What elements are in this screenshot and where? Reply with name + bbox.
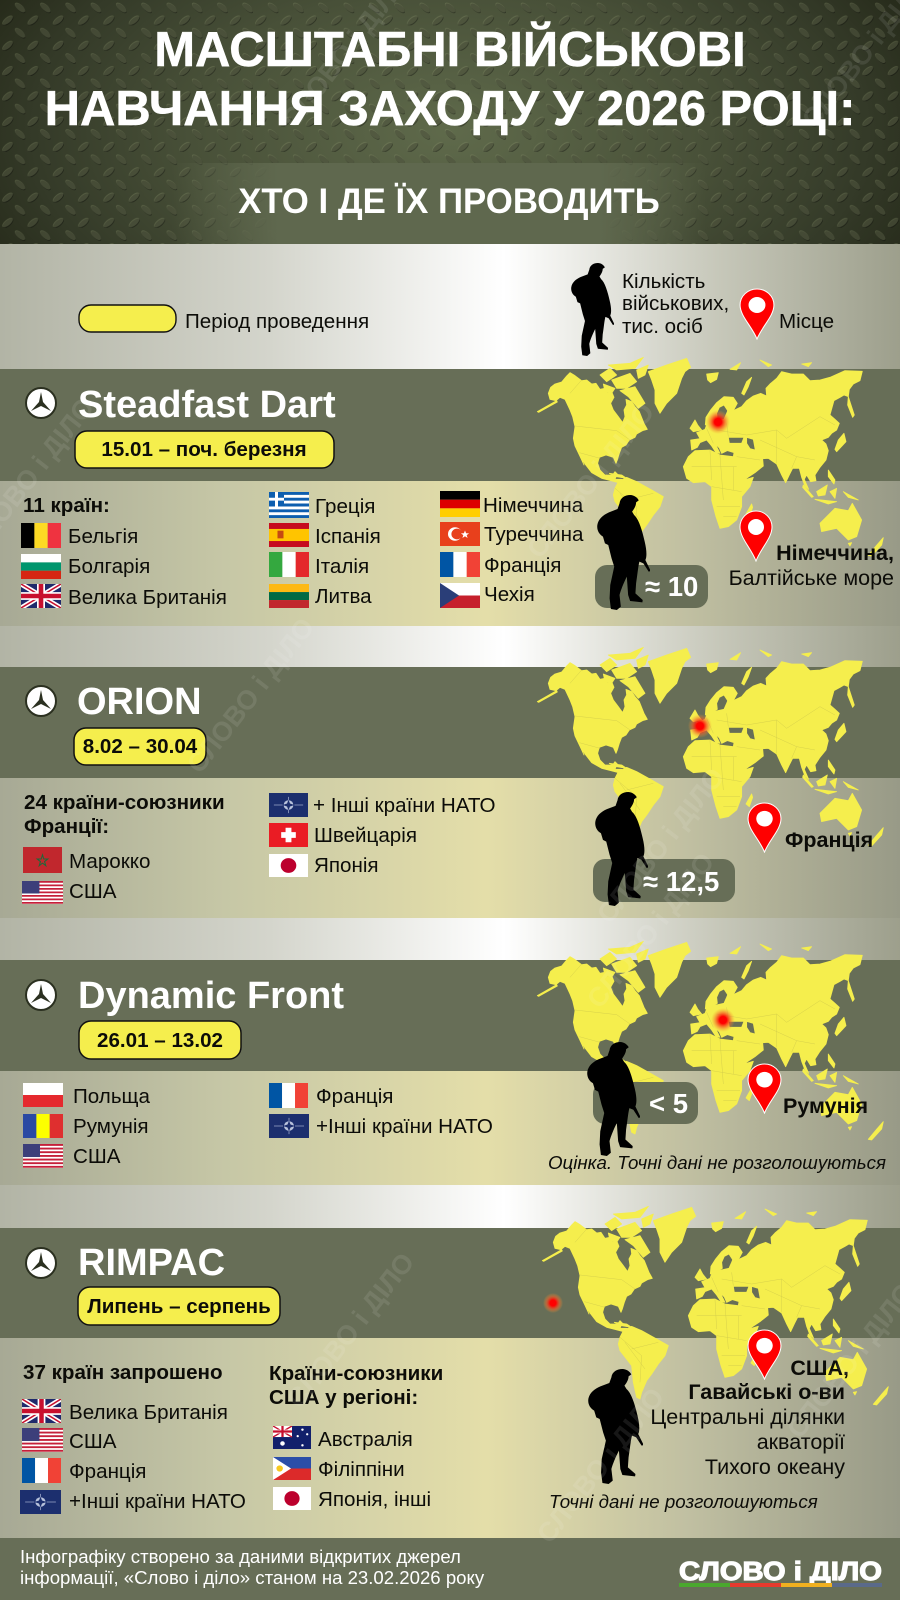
country: Польща: Польща [73,1085,150,1108]
soldier [587,1042,641,1156]
troops pill [595,565,708,608]
country: Японія: Японія [314,854,379,877]
country: Литва [269,584,372,608]
legend: soldier icon [571,263,615,356]
exercise icon [26,686,56,716]
allies heading: США у регіоні: [269,1386,418,1409]
legend: soldier label: тис. осіб [622,315,703,338]
troops pill: < 5 [649,1088,688,1119]
country: Велика Британія: Велика Британія [68,586,227,609]
title: НАВЧАННЯ ЗАХОДУ У 2026 РОЦІ: [45,82,855,136]
legend strip [0,244,900,369]
legend: period label: Період проведення [185,310,369,333]
country: США [22,880,117,904]
country: Філіппіни [273,1457,405,1481]
country: Велика Британія: Велика Британія [69,1401,228,1424]
country: Німеччина: Німеччина [483,494,584,517]
soldier [588,1369,644,1484]
location text: Балтійське море [729,566,894,590]
country: Філіппіни: Філіппіни [318,1458,405,1481]
location text: Тихого океану [705,1455,845,1479]
period pill: 8.02 – 30.04 [83,735,198,758]
country: Франція: Франція [69,1460,146,1483]
heading: Steadfast Dart [78,384,336,426]
panel: RIMPAC [0,1206,900,1538]
country: США: США [69,880,117,903]
heading: Dynamic Front [78,975,344,1017]
header background [0,0,900,244]
exercise icon [26,388,56,418]
spacer bands [0,626,900,1228]
period pill [75,431,334,468]
country: Марокко [23,847,150,873]
location text: акваторії [757,1430,845,1454]
allies heading: Країни-союзники [269,1362,443,1385]
country: Туреччина: Туреччина [484,523,584,546]
country: Іспанія [269,523,381,548]
location text [729,541,894,590]
source note: інформації, «Слово і діло» станом на 23.02.2026 року [20,1567,485,1588]
country: Франція: Франція [484,554,561,577]
troops pill [593,859,735,902]
invited heading: 37 країн запрошено [23,1361,223,1384]
watermarks: СЛОВО і ДІЛО [581,847,720,1014]
panel: ORION [0,647,900,918]
country: Литва: Литва [315,585,372,608]
legend: soldier label [622,270,729,338]
heading: RIMPAC [78,1242,225,1284]
legend: place label: Місце [779,310,834,333]
location pin [748,1064,781,1113]
country: Японія [273,1487,431,1511]
country: Бельгія: Бельгія [68,525,138,548]
allies heading [24,791,225,838]
map marker [688,714,712,738]
location text [650,1356,849,1479]
footer [0,1538,900,1600]
legend: pin icon [740,289,774,339]
country: Інші країни НАТО: +Інші країни НАТО [69,1490,246,1513]
exercise icon [26,1248,56,1278]
country: Болгарія [21,554,150,579]
location text: Центральні ділянки [650,1405,845,1429]
country: Японія: Японія, інші [318,1488,431,1511]
note: Оцінка. Точні дані не розголошуються [548,1152,886,1173]
exercise icon [26,980,56,1010]
heading: ORION [77,681,202,723]
watermarks: СЛОВО і ДІЛО [181,612,320,779]
soldier [595,792,649,906]
soldier [597,495,651,610]
troops pill: ≈ 10 [645,571,698,602]
country: Австралія: Австралія [318,1428,413,1451]
legend: soldier label: військових, [622,292,729,315]
watermarks: СЛОВО і ДІЛО [531,1382,670,1549]
location text: Німеччина, [776,541,894,565]
location pin [740,511,772,561]
country: Чехія: Чехія [484,583,535,606]
country: Франція [440,552,561,577]
period pill: 15.01 – поч. березня [101,438,307,461]
country: Іспанія: Іспанія [315,525,381,548]
country: США: США [69,1430,117,1453]
country: Марокко: Марокко [69,850,150,873]
subtitle: ХТО І ДЕ ЇХ ПРОВОДИТЬ [238,182,660,221]
legend: period swatch [79,305,176,332]
countries count: 11 країн: [23,494,110,517]
troops pill: ≈ 12,5 [643,866,719,897]
country: Румунія: Румунія [73,1115,149,1138]
country: Греція: Греція [315,495,375,518]
location text: Гавайські о-ви [688,1380,845,1404]
country: Японія [269,854,379,877]
watermarks: СЛОВО і ДІЛО [591,762,730,929]
troops pill [593,1082,698,1124]
allies heading: 24 країни-союзники [24,791,225,814]
watermarks: СЛОВО і ДІЛО [281,1247,420,1414]
country: Італія [269,552,369,578]
country: Франція [22,1458,146,1483]
country: Греція [269,492,375,518]
title: МАСШТАБНІ ВІЙСЬКОВІ [154,22,746,77]
country: США [23,1144,121,1168]
map marker [706,410,730,434]
panel: Dynamic Front [0,941,900,1185]
location pin [748,803,781,852]
world map [537,647,883,846]
period pill: 26.01 – 13.02 [97,1029,223,1052]
period pill: Липень – серпень [87,1295,271,1318]
location text: Румунія [783,1094,868,1118]
country: Чехія [440,583,535,608]
country: Австралія [273,1426,413,1451]
country: Бельгія [21,523,138,548]
period pill [79,1021,241,1059]
note: Точні дані не розголошуються [549,1491,818,1512]
country: Туреччина [440,522,584,546]
country: Швейцарія: Швейцарія [314,824,417,847]
world map [542,1206,888,1405]
country: США [22,1428,117,1453]
country: Польща [23,1083,150,1108]
location text: Франція [785,828,873,852]
location text: США, [790,1356,849,1380]
country: Швейцарія [269,823,417,847]
logo: СЛОВО і ДІЛО [679,1556,882,1586]
period pill [78,1287,280,1325]
legend: soldier label: Кількість [622,270,705,293]
map marker [711,1008,735,1032]
source note [20,1546,485,1588]
allies heading [269,1362,443,1409]
country: Франція: Франція [316,1085,393,1108]
title [45,22,855,136]
country: США: США [73,1145,121,1168]
country: Італія: Італія [315,555,369,578]
country: Німеччина [440,491,584,517]
country: Румунія [23,1114,149,1138]
country: Інші країни НАТО: +Інші країни НАТО [316,1115,493,1138]
world map [537,357,883,556]
world map [537,941,883,1140]
location pin [748,1330,781,1379]
country: Інші країни НАТО: + Інші країни НАТО [313,794,496,817]
source note: Інфографіку створено за даними відкритих джерел [20,1546,461,1567]
period pill [74,728,206,765]
country: Франція [269,1083,393,1108]
allies heading: Франції: [24,815,109,838]
panel: Steadfast Dart [0,357,900,626]
country: Болгарія: Болгарія [68,555,150,578]
watermarks: СЛОВО і ДІЛО [521,397,660,564]
map marker [543,1293,563,1313]
